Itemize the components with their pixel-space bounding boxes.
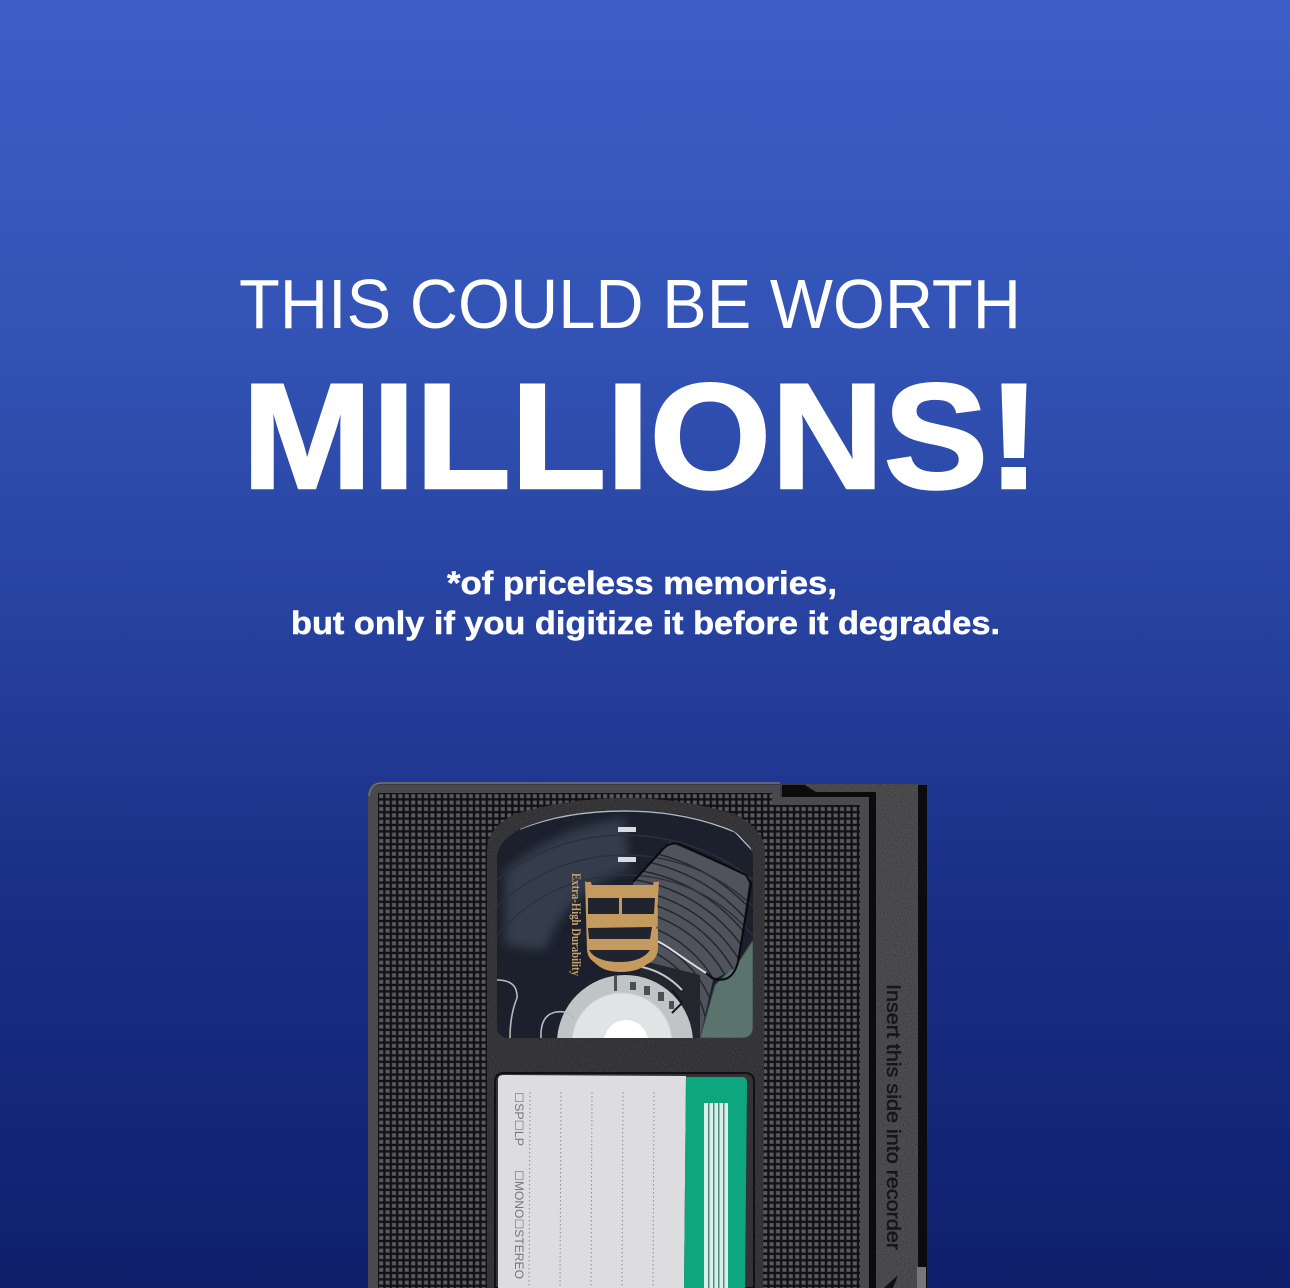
audio mode label: ☐MONO☐STEREO [512,1170,524,1279]
arrow wedge [884,1275,898,1288]
dark wire on hub [672,990,682,1013]
tape speed label: ☐SP☐LP [512,1092,524,1146]
extra high durability text: Extra-High Durability [569,873,584,976]
window highlights [520,811,752,850]
faint tape rings [497,834,753,936]
corner tab [917,1267,926,1288]
black slot [782,785,876,1288]
hub core [604,1020,648,1038]
hub rim highlight [642,967,682,990]
centre column [487,798,765,1288]
barcode stripes [704,1103,728,1288]
wire black [633,843,751,980]
dark slots [588,898,655,962]
subtext [291,565,1000,641]
gold block [585,881,659,972]
heading: millions: MILLIONS! [242,352,1040,520]
tape wind [633,842,750,1038]
label recess [495,1073,754,1288]
top step frame [368,785,869,1288]
left wires [497,980,574,1038]
black edge strip [918,785,927,1288]
dotted label lines [529,1092,654,1288]
hub [557,975,693,1038]
hub inner [572,992,672,1038]
hd logo [563,881,682,972]
cassette body [368,782,927,1288]
subtext: but only if you digitize it before it degrades. [291,605,1000,641]
heading: this could be worth: THIS COULD BE WORTH [239,265,1021,343]
right side strip [805,784,918,1288]
lower right green reflection [700,940,753,1038]
top highlight [369,783,780,796]
hub teeth [614,975,674,1009]
small white marks [618,827,636,862]
hd text: HD [563,881,682,971]
tape shading [640,960,700,1038]
paper label [498,1075,686,1288]
subtext: *of priceless memories, [447,565,837,601]
haze [505,818,630,950]
tape window [497,810,753,1038]
green label band [684,1077,747,1288]
textured grid surface [378,793,860,1288]
vhs cassette [368,782,927,1288]
insert instruction: Insert this side into recorder [882,984,903,1251]
wire white [658,940,706,974]
